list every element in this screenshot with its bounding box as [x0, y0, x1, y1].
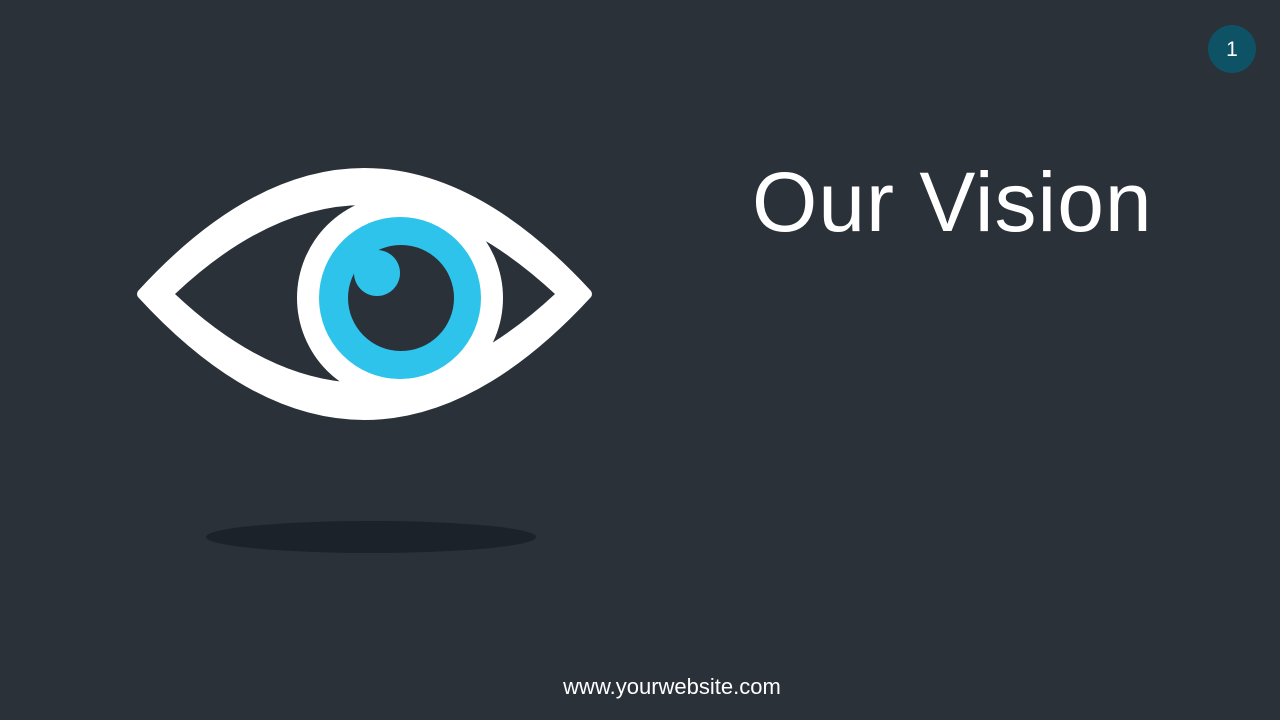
- shadow: [206, 521, 536, 553]
- eye outline: [142, 173, 587, 415]
- footer url: www.yourwebsite.com: [563, 674, 781, 699]
- iris: [297, 195, 503, 401]
- title: Our Vision: [752, 155, 1153, 249]
- page number badge: 1: [1226, 38, 1238, 61]
- page number badge: [1208, 25, 1256, 73]
